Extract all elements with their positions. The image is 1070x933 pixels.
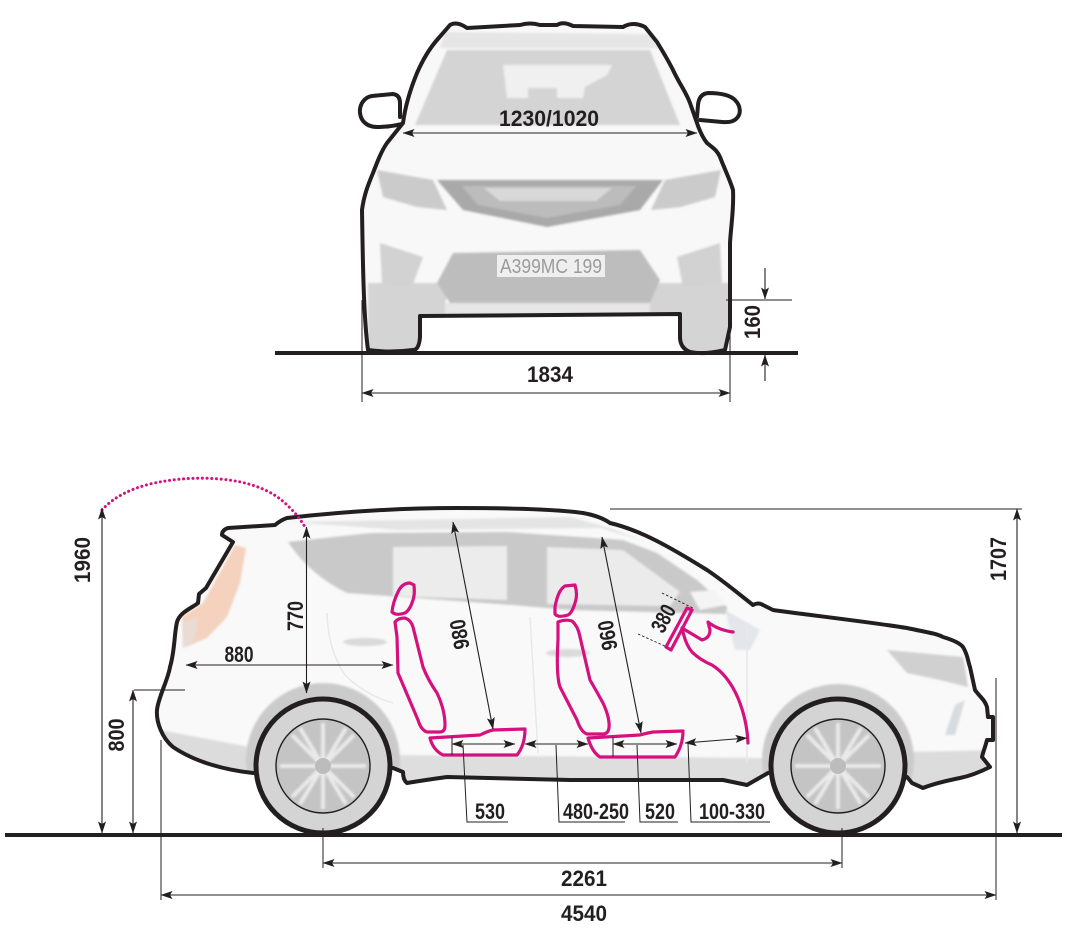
dimension: 1230/1020 interior width: 1230/1020 — [499, 106, 599, 131]
dimension: 2261 wheelbase — [323, 828, 842, 891]
side ground line — [5, 833, 1062, 837]
dimension: 980 rear headroom: 980 — [445, 617, 475, 651]
dimension: 380 steering wheel — [638, 593, 693, 647]
dimension: 520 front cushion: 520 — [645, 799, 675, 824]
tailgate open arc — [102, 478, 305, 527]
dimension: 960 front headroom: 960 — [593, 618, 623, 652]
door seams — [327, 613, 747, 763]
right mirror — [697, 93, 740, 122]
dimension: 160 ground clearance: 160 — [740, 305, 765, 339]
front wheel — [771, 699, 905, 833]
dimension: 1960 open tailgate height: 1960 — [70, 537, 95, 583]
steering wheel and driver outline — [666, 608, 748, 743]
dimension: 1707 overall height: 1707 — [986, 537, 1011, 581]
dimension: 880 rear legroom length: 880 — [224, 642, 254, 667]
side body photo — [162, 516, 987, 786]
dimension: 100-330 front legroom — [685, 738, 770, 824]
dimension: 980 rear headroom — [445, 522, 493, 729]
rear seat — [392, 583, 525, 755]
front body photo — [366, 30, 728, 351]
front seat — [555, 585, 683, 757]
side view of the car — [150, 500, 1000, 837]
front view of the car — [355, 15, 740, 355]
front outline — [362, 23, 733, 353]
dimension: 4540 overall length — [161, 678, 996, 926]
dimension: 1834 overall width: 1834 — [527, 362, 574, 387]
dimension: 160 ground clearance — [726, 268, 792, 381]
dimension: 800 loading height: 800 — [104, 718, 129, 752]
licence plate text: А399МС 199 — [500, 256, 602, 278]
sill outline — [393, 768, 768, 785]
left mirror — [360, 94, 402, 127]
dimension: 2261 wheelbase: 2261 — [561, 866, 607, 891]
dimension: 480-250 rear legroom — [525, 744, 629, 824]
dimension: 1834 overall width — [362, 300, 730, 402]
front ground line — [275, 351, 798, 355]
dimension: 530 rear cushion — [452, 737, 515, 824]
dimension: 4540 overall length: 4540 — [561, 901, 607, 926]
dimension: 480-250 rear legroom: 480-250 — [563, 799, 629, 824]
dimension: 770 cargo height: 770 — [283, 601, 308, 631]
dimension: 960 front headroom — [593, 537, 641, 733]
side outline — [157, 508, 993, 788]
dimension: 530 rear cushion: 530 — [475, 799, 505, 824]
dimension: 100-330 front legroom: 100-330 — [699, 799, 765, 824]
rear wheel — [256, 699, 390, 833]
dimension: 520 front cushion — [613, 737, 678, 824]
dimension: 380 steering wheel: 380 — [646, 600, 681, 637]
